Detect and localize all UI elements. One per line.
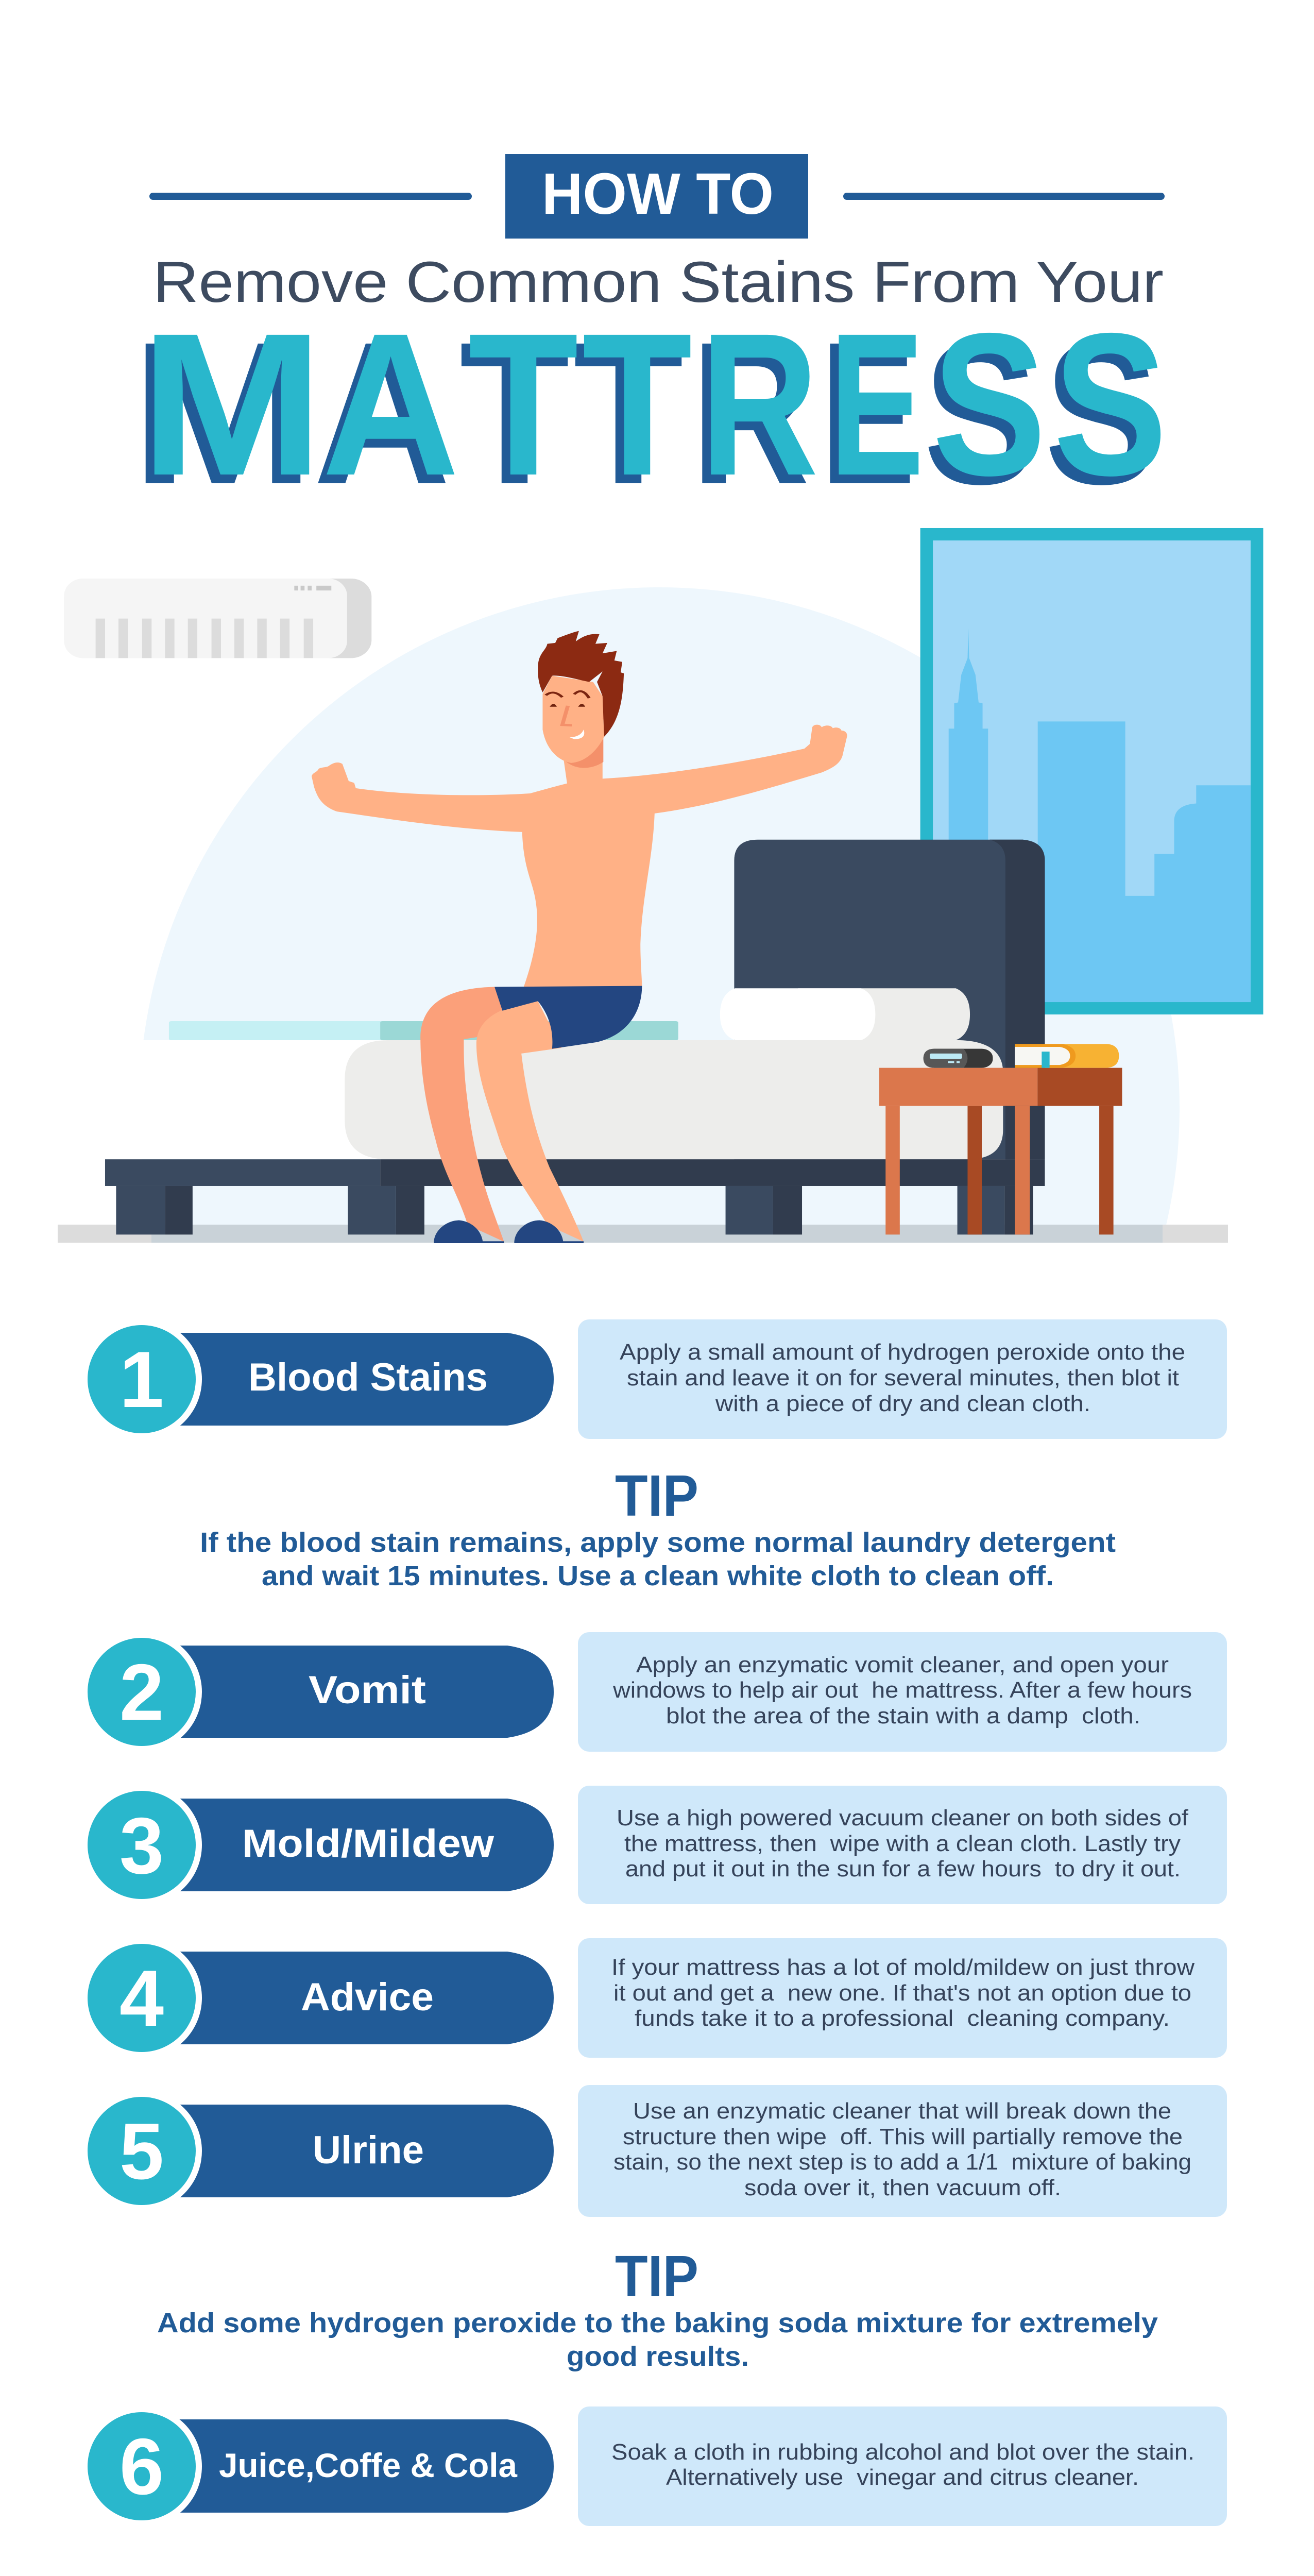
floor: [58, 1225, 1228, 1243]
description panel: Use an enzymatic cleaner that will break down the: [633, 2098, 1171, 2124]
step 2: vomit: [81, 1632, 1227, 1752]
background circle: [143, 587, 1180, 1225]
tip text: Add some hydrogen peroxide to the baking soda mixture for extremely: [157, 2308, 1158, 2338]
number badge: 2: [120, 1648, 164, 1737]
number badge: 3: [120, 1801, 164, 1890]
how to badge: [505, 154, 808, 239]
mattress heading: S: [1053, 291, 1167, 518]
neck shadow: [565, 737, 603, 768]
number badge: 4: [120, 1954, 164, 2043]
description panel: Apply an enzymatic vomit cleaner, and open your: [636, 1652, 1169, 1677]
step 5: urine: [81, 2085, 1227, 2217]
smile: [570, 730, 584, 739]
label: Blood Stains: [248, 1355, 488, 1399]
description panel: [578, 1319, 1227, 1439]
number badge: [81, 1785, 202, 1905]
mattress heading: M: [140, 291, 324, 518]
description panel: If your mattress has a lot of mold/mildew on just throw: [611, 1955, 1194, 1980]
bedroom illustration: [58, 528, 1263, 1243]
mattress heading: T: [468, 291, 578, 518]
eyes: [550, 704, 585, 707]
bedside table: [879, 1068, 1122, 1234]
face: [542, 676, 604, 763]
description panel: and put it out in the sun for a few hours to dry it out.: [625, 1856, 1181, 1882]
description panel: windows to help air out he mattress. After a few hours: [612, 1677, 1192, 1703]
number badge: [81, 2091, 202, 2211]
mattress heading shadow: M: [131, 300, 315, 527]
description panel: blot the area of the stain with a damp cloth.: [666, 1703, 1140, 1728]
alarm clock: [924, 1049, 993, 1068]
description panel: with a piece of dry and clean cloth.: [715, 1391, 1090, 1416]
mattress heading shadow: R: [691, 300, 810, 527]
description panel: structure then wipe off. This will partially remove the: [623, 2124, 1183, 2149]
label pill: [177, 2105, 554, 2197]
torso and arms: [312, 725, 847, 987]
headboard: [734, 840, 1045, 1159]
label pill: [177, 1799, 554, 1891]
air conditioner: [64, 579, 371, 658]
mattress heading shadow: T: [573, 300, 684, 527]
mattress heading: T: [582, 291, 692, 518]
tip text: [157, 2308, 1158, 2372]
description panel: [578, 2406, 1227, 2526]
description panel: the mattress, then wipe with a clean cloth. Lastly try: [624, 1831, 1181, 1856]
back leg: [420, 987, 554, 1242]
number badge: [81, 1319, 202, 1439]
description panel: [578, 1632, 1227, 1752]
label pill: [177, 1333, 554, 1426]
description panel: it out and get a new one. If that's not an option due to: [613, 1980, 1191, 2006]
label pill: [177, 1646, 554, 1738]
label: Juice,Coffe & Cola: [219, 2446, 518, 2484]
front leg: [476, 1001, 584, 1242]
mattress heading: E: [829, 291, 924, 518]
step 4: advice: [81, 1938, 1227, 2058]
title block: [131, 154, 1167, 527]
description panel: [578, 1786, 1227, 1904]
white mattress left side: [135, 1040, 393, 1159]
step 3: mold and mildew: [81, 1785, 1227, 1905]
step 6: juice, coffee and cola: [81, 2406, 1227, 2527]
ear: [603, 697, 617, 720]
number badge: [81, 1938, 202, 2058]
number badge: 1: [120, 1335, 164, 1424]
mattress heading: R: [700, 291, 818, 518]
mattress heading shadow: T: [459, 300, 570, 527]
tip 2: [157, 2244, 1158, 2372]
label: Mold/Mildew: [242, 1822, 494, 1866]
man stretching: [312, 631, 847, 1243]
number badge: [81, 1632, 202, 1752]
right slipper: [514, 1221, 584, 1243]
number badge: 5: [120, 2107, 164, 2196]
tip heading: TIP: [615, 2244, 698, 2309]
number badge: [81, 2406, 202, 2527]
label: Ulrine: [313, 2128, 424, 2172]
left title rule: [149, 193, 472, 200]
pillow: [720, 988, 970, 1040]
subtitle: Remove Common Stains From Your: [153, 250, 1164, 314]
book: [1015, 1044, 1119, 1068]
description panel: Soak a cloth in rubbing alcohol and blot over the stain.: [611, 2439, 1194, 2465]
label pill: [177, 2419, 554, 2513]
left slipper: [434, 1221, 504, 1243]
nose: [562, 706, 572, 725]
number badge: 6: [120, 2422, 164, 2511]
tip 1: [200, 1463, 1116, 1591]
right title rule: [843, 193, 1165, 200]
description panel: [578, 2085, 1227, 2217]
mattress heading shadow: E: [821, 300, 915, 527]
mattress heading shadow: A: [313, 300, 451, 527]
mattress: [345, 1040, 1003, 1159]
description panel: stain and leave it on for several minutes, then blot it: [627, 1365, 1179, 1391]
tip heading: TIP: [615, 1463, 698, 1528]
description panel: Use a high powered vacuum cleaner on both sides of: [617, 1805, 1189, 1831]
label: Advice: [301, 1975, 434, 2019]
tip text: If the blood stain remains, apply some normal laundry detergent: [200, 1527, 1116, 1558]
hair: [538, 631, 624, 737]
shorts: [494, 986, 642, 1049]
mattress heading shadow: S: [924, 300, 1037, 527]
bed frame: [105, 1159, 1045, 1186]
label: Vomit: [309, 1668, 426, 1712]
window with skyline: [920, 528, 1263, 1014]
description panel: soda over it, then vacuum off.: [744, 2175, 1061, 2200]
tip text: [200, 1527, 1116, 1591]
step 1: blood stains: [81, 1319, 1227, 1439]
mattress heading shadow: S: [1045, 300, 1158, 527]
description panel: Alternatively use vinegar and citrus cleaner.: [666, 2465, 1139, 2490]
label pill: [177, 1952, 554, 2044]
description panel: stain, so the next step is to add a 1/1 mixture of baking: [613, 2149, 1191, 2175]
bed legs: [116, 1186, 1033, 1234]
tip text: good results.: [567, 2341, 749, 2372]
top sheet strip: [169, 1021, 678, 1040]
description panel: funds take it to a professional cleaning company.: [635, 2006, 1170, 2031]
tip text: and wait 15 minutes. Use a clean white cloth to clean off.: [262, 1561, 1054, 1591]
mattress heading: S: [932, 291, 1046, 518]
how to badge: HOW TO: [542, 161, 774, 226]
description panel: [578, 1938, 1227, 2058]
mattress heading: A: [322, 291, 459, 518]
eyebrows: [546, 691, 589, 698]
description panel: Apply a small amount of hydrogen peroxide onto the: [620, 1340, 1185, 1365]
